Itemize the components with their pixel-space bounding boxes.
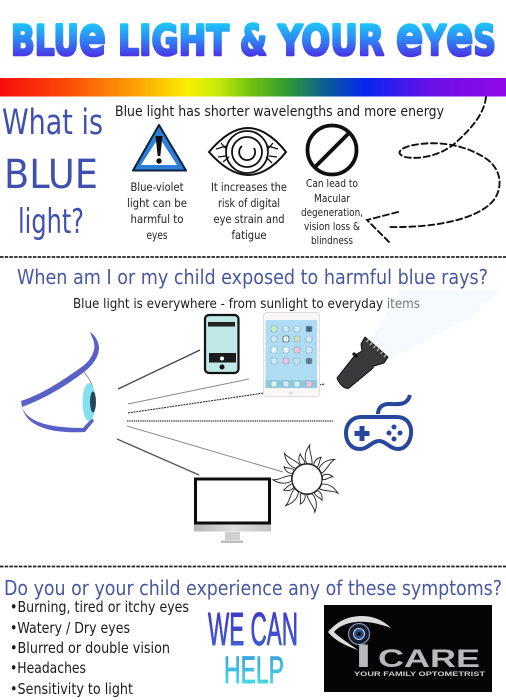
title: & [240,16,267,65]
we can help callout: HELP [224,650,284,692]
icon: strained eye [209,128,286,175]
logo: icare your family optometrist [324,605,492,692]
icon: tablet [264,312,320,396]
rainbow spectrum bar [0,78,506,96]
icon: desktop monitor [194,479,271,543]
arrow: dashed looping arrow [367,97,500,243]
exposure sub-heading: Blue light is everywhere - from sunlight to everyday items [73,297,420,312]
caption: blue-violet light [127,180,187,242]
icon: flashlight [337,337,388,388]
symptoms list [10,598,189,698]
caption: blue-violet light: Blue-violet [130,180,184,194]
icon: prohibition sign [308,126,356,174]
caption: digital eye strain: eye strain and [214,212,284,226]
caption: macular degeneration: degeneration, [301,207,363,219]
caption: macular degeneration: blindness [311,235,353,247]
symptoms list: •Sensitivity to light [10,680,133,698]
heading: what is blue light [2,103,103,242]
caption: macular degeneration [301,178,363,247]
heading: what is blue light: light? [18,202,84,242]
title: LIGHT [118,16,229,65]
symptoms list: •Headaches [10,659,86,677]
caption: digital eye strain: fatigue [232,228,266,242]
icon: warning triangle [133,125,186,170]
title: eYeS [396,5,496,68]
caption: digital eye strain [211,180,287,242]
intro sentence: Blue light has shorter wavelengths and more energy [115,104,444,120]
flashlight beam glow [372,290,500,358]
caption: macular degeneration: Can lead to [306,178,358,190]
icon: smartphone [205,315,238,373]
symptoms list: •Burning, tired or itchy eyes [10,598,189,616]
heading: what is blue light: BLUE [4,152,98,198]
title: YOUR [277,16,384,65]
divider [0,566,506,568]
logo: icare your family optometrist: I [355,639,372,674]
rays from devices to the eye [117,350,333,475]
title: BLUe [11,5,106,68]
logo: icare your family optometrist: CARE [378,645,480,673]
heading: what is blue light: What is [2,103,103,143]
icon: sun [273,445,339,513]
we can help callout [208,603,298,692]
caption: macular degeneration: Macular [314,193,351,205]
icon: side view of eye [21,332,99,432]
icon: game controller [346,395,411,449]
logo: icare your family optometrist: YOUR FAMILY OPTOMETRIST [354,671,485,678]
caption: digital eye strain: risk of digital [218,196,280,210]
title [11,5,496,68]
symptoms list: •Blurred or double vision [10,639,170,657]
symptoms list: •Watery / Dry eyes [10,619,130,637]
divider [0,256,506,258]
text: WE CAN [208,603,298,655]
caption: macular degeneration: vision loss & [304,221,360,233]
caption: digital eye strain: It increases the [211,180,287,194]
caption: blue-violet light: eyes [146,228,168,242]
caption: blue-violet light: harmful to [130,212,184,226]
caption: blue-violet light: light can be [127,196,187,210]
